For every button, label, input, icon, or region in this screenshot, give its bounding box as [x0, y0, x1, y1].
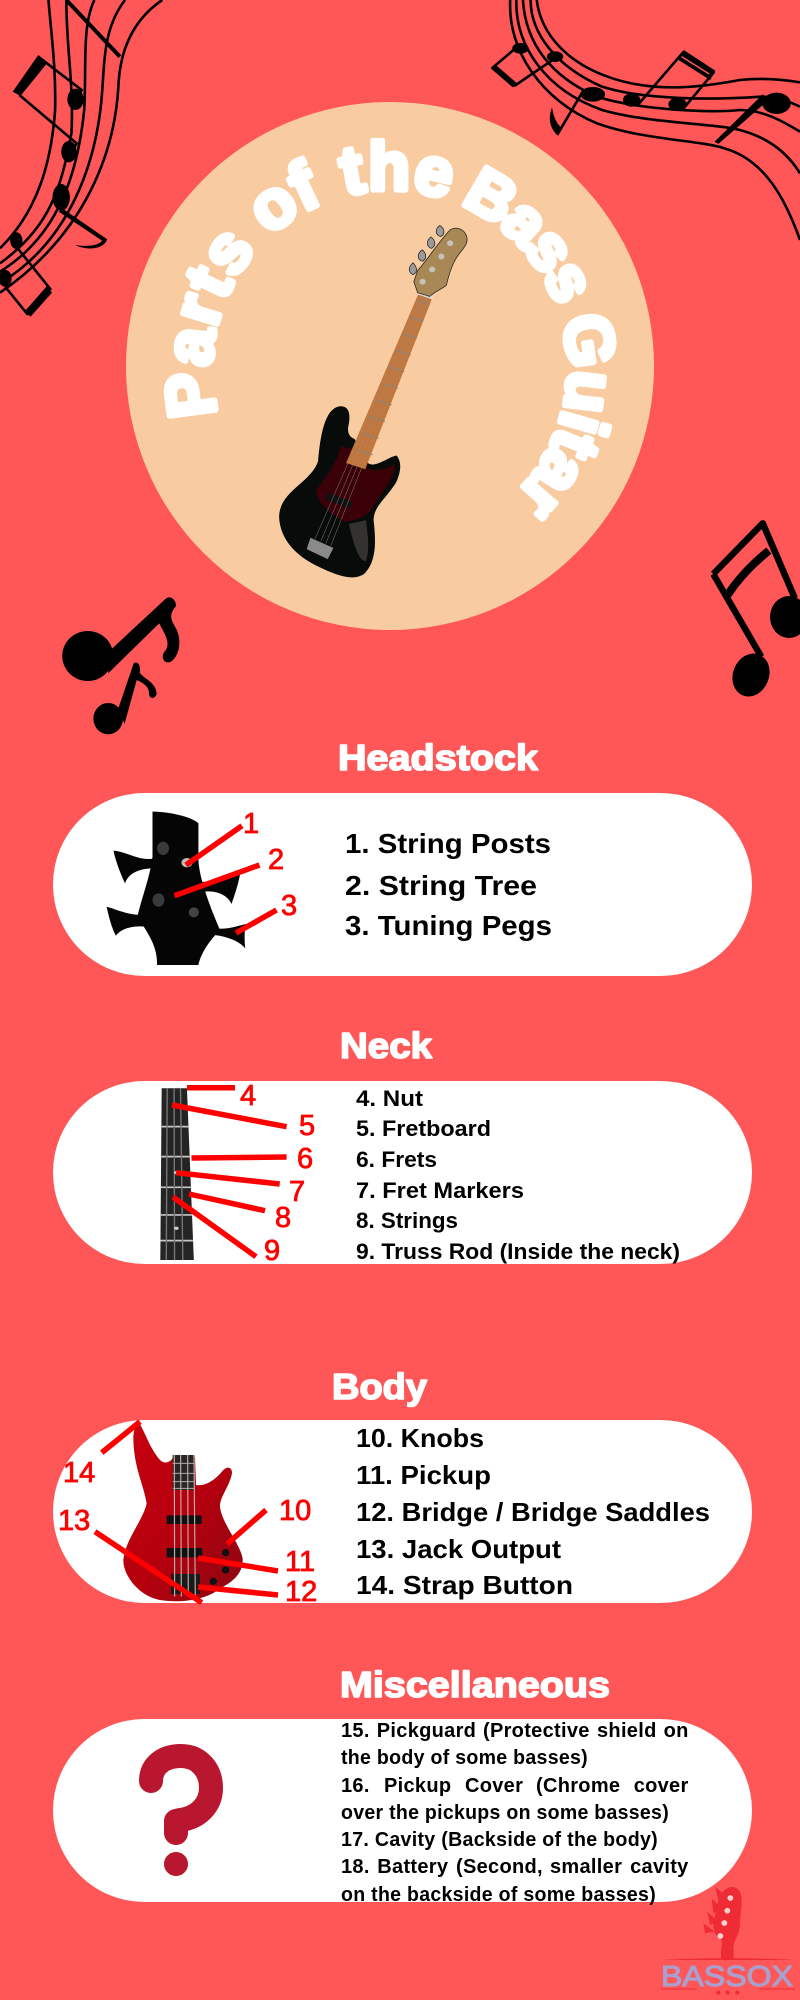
nut — [418, 292, 433, 299]
panel: miscellaneous — [53, 1719, 752, 1906]
list: miscellaneous parts: (Protective — [483, 1720, 590, 1742]
callout numbers: 1 to 3: 3 — [281, 890, 297, 922]
list: neck parts: 5. Fretboard — [356, 1116, 491, 1141]
fretboard — [346, 294, 432, 469]
icon: beamed notes lower left — [62, 597, 179, 734]
list: neck parts: 9. Truss Rod (Inside the neck) — [356, 1239, 680, 1264]
bridge — [307, 538, 333, 559]
callout numbers: 1 to 3: 2 — [268, 844, 284, 876]
list: body parts: 14. Strap Button — [356, 1570, 573, 1600]
list: miscellaneous parts: (Chrome — [536, 1775, 620, 1797]
strings — [315, 295, 429, 546]
list: miscellaneous parts: 17. Cavity (Backside of the body) — [341, 1829, 658, 1851]
list: neck parts: 4. Nut — [356, 1086, 424, 1111]
photo: neck — [160, 1088, 194, 1260]
callout numbers: 1 to 3: 1 — [243, 808, 259, 840]
illustration: jazz bass guitar — [279, 225, 467, 577]
list: body parts: 13. Jack Output — [356, 1534, 561, 1564]
list: miscellaneous parts: Pickup — [384, 1775, 451, 1797]
callout numbers: 10 to 14: 13 — [58, 1505, 90, 1537]
list: miscellaneous parts: 15. — [341, 1720, 370, 1742]
pickguard — [316, 446, 395, 522]
callout numbers: 4 to 9: 6 — [297, 1143, 313, 1175]
title: curved heading: PartsoftheBass Guitar — [164, 138, 616, 522]
list: miscellaneous parts: 16. — [341, 1775, 370, 1797]
panel: body — [53, 1420, 752, 1608]
callout numbers: 10 to 14 — [58, 1457, 317, 1608]
list: body parts — [356, 1423, 710, 1600]
callout numbers: 4 to 9: 5 — [299, 1110, 315, 1142]
photo: red bass body — [123, 1423, 243, 1601]
icon: double note right — [713, 523, 800, 702]
logo headstock — [661, 1887, 795, 1995]
list: miscellaneous parts: cavity — [630, 1856, 689, 1878]
list: neck parts: 6. Frets — [356, 1147, 437, 1172]
list: miscellaneous parts: smaller — [550, 1856, 622, 1878]
callout numbers: 4 to 9 — [240, 1080, 315, 1267]
callout numbers: 4 to 9: 9 — [264, 1235, 280, 1267]
callout numbers: 4 to 9: 4 — [240, 1080, 256, 1112]
list: miscellaneous parts: Pickguard — [377, 1720, 476, 1742]
headstock — [414, 228, 467, 296]
callout numbers: 10 to 14: 10 — [279, 1495, 311, 1527]
logo: Bassox — [661, 1887, 795, 1995]
pickup — [326, 493, 353, 508]
callout numbers: 10 to 14: 11 — [285, 1546, 315, 1578]
list: body parts: 12. Bridge / Bridge Saddles — [356, 1497, 710, 1527]
guitar body — [279, 406, 400, 577]
control plate — [349, 520, 368, 561]
list: miscellaneous parts: Battery — [377, 1856, 449, 1878]
section heading: Neck: Neck — [340, 1025, 433, 1066]
logo wordmark: BASSOX — [661, 1961, 793, 1993]
frets — [356, 300, 430, 455]
list: headstock parts: 2. String Tree — [345, 870, 537, 901]
list: headstock parts: 3. Tuning Pegs — [345, 910, 552, 941]
callout numbers: 4 to 9: 7 — [289, 1176, 305, 1208]
tuning pegs — [409, 225, 444, 275]
panel: title circle — [126, 102, 654, 630]
list: headstock parts: 1. String Posts — [345, 828, 551, 859]
list: miscellaneous parts: on the backside of some basses) — [341, 1884, 656, 1906]
list: miscellaneous parts — [341, 1720, 689, 1906]
list: neck parts: 7. Fret Markers — [356, 1178, 524, 1203]
list: neck parts — [356, 1086, 680, 1264]
list: body parts: 11. Pickup — [356, 1460, 491, 1490]
list: miscellaneous parts: 18. — [341, 1856, 370, 1878]
photo: headstock — [107, 812, 246, 965]
callout lines: 1 to 3 — [174, 826, 276, 933]
tuner posts — [420, 240, 453, 285]
section heading: Miscellaneous: Miscellaneous — [340, 1664, 610, 1705]
list: miscellaneous parts: the body of some basses) — [341, 1747, 588, 1769]
list: miscellaneous parts: over the pickups on some basses) — [341, 1802, 669, 1824]
list: miscellaneous parts: cover — [634, 1775, 689, 1797]
callout numbers: 10 to 14: 12 — [285, 1576, 317, 1608]
list: miscellaneous parts: on — [664, 1720, 689, 1742]
section heading: Headstock: Headstock — [338, 737, 539, 778]
list: headstock parts — [345, 828, 552, 941]
decoration: top-right music staff — [491, 0, 800, 240]
decoration: top-left music staff — [0, 0, 162, 317]
callout numbers: 4 to 9: 8 — [275, 1202, 291, 1234]
panel: headstock — [53, 793, 752, 976]
list: miscellaneous parts: shield — [597, 1720, 657, 1742]
callout numbers: 1 to 3 — [243, 808, 297, 922]
list: neck parts: 8. Strings — [356, 1208, 458, 1233]
callout lines: 10 to 14 — [95, 1422, 278, 1603]
callout numbers: 10 to 14: 14 — [63, 1457, 95, 1489]
list: miscellaneous parts: Cover — [465, 1775, 523, 1797]
icon: question mark — [151, 1756, 211, 1876]
list: miscellaneous parts: (Second, — [456, 1856, 543, 1878]
section heading: Body: Body — [332, 1366, 427, 1407]
callout lines: 4 to 9 — [172, 1088, 287, 1257]
list: body parts: 10. Knobs — [356, 1423, 484, 1453]
panel: neck — [53, 1080, 752, 1267]
